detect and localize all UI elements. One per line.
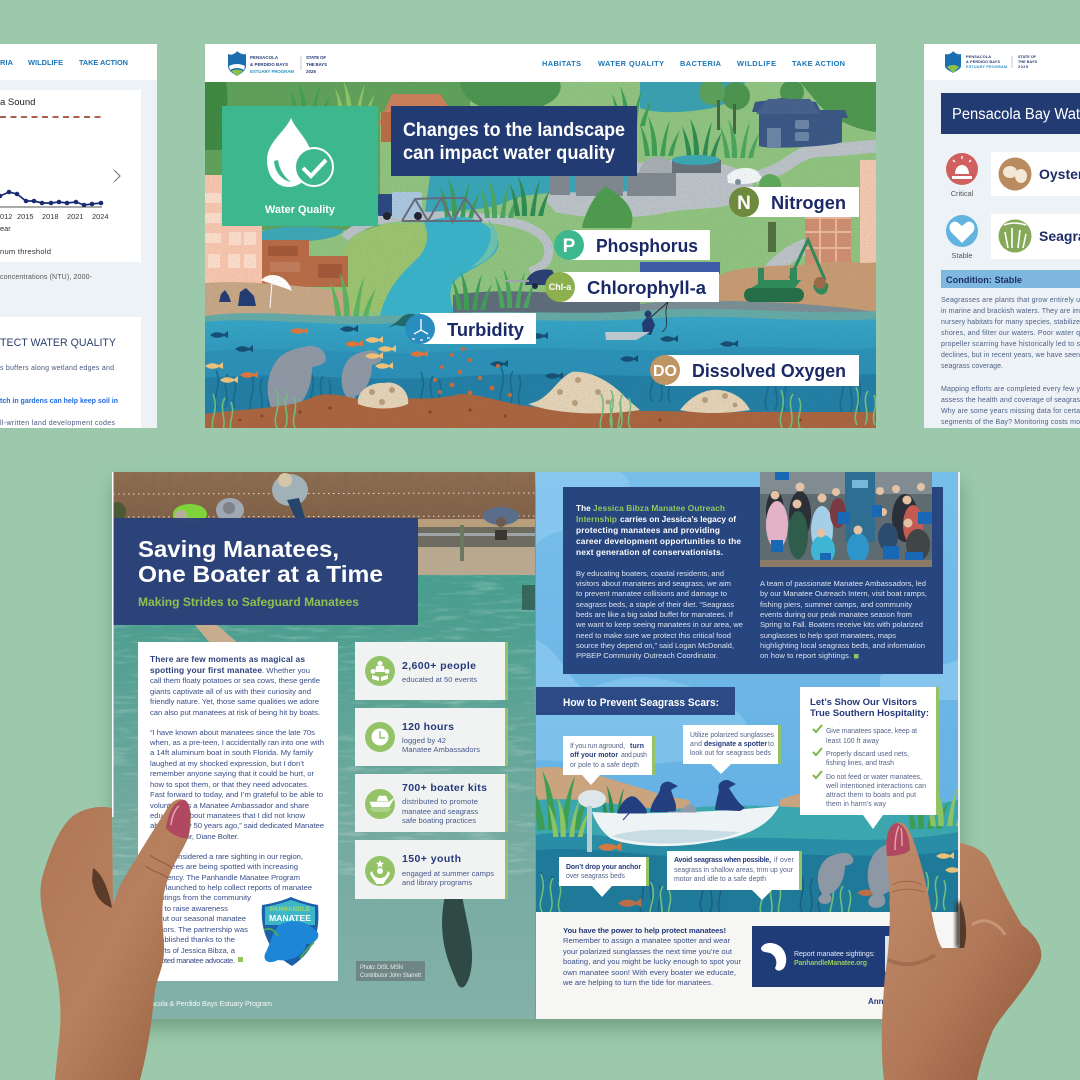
panel: left web page, turbidity chart: num threshold	[0, 247, 51, 256]
panel: right web page, Pensacola Bay status: segments of the Bay? Monitoring costs mo	[941, 419, 1080, 426]
panel: centre web page header: THE BAYS	[306, 62, 327, 67]
callout: anchor	[559, 857, 649, 897]
boat with passengers	[578, 780, 779, 852]
internship story panel: sunglasses to help spot manatees, maps	[760, 631, 896, 640]
title block: One Boater at a Time	[138, 561, 383, 587]
label: nitrogen: Nitrogen	[771, 192, 846, 213]
callout: southern hospitality tips: Give manatees space, keep at	[826, 728, 917, 735]
panel: right web page, Pensacola Bay status: in marine and brackish waters. They are im	[941, 308, 1080, 315]
label: turbidity: Turbidity	[447, 319, 525, 340]
panel: right web page, Pensacola Bay status: 2025	[1018, 65, 1028, 69]
label: chlorophyll-a: Chl-a	[549, 282, 572, 292]
internship story panel: career development opportunities to the	[576, 536, 741, 546]
stat card: people	[355, 642, 508, 700]
magazine drop shadow	[112, 482, 962, 1030]
article text panel: spotting your first manatee	[150, 665, 262, 675]
heading: changes to the landscape: can impact water quality	[403, 143, 615, 164]
panel: left web page, turbidity chart: ll-written land development codes	[0, 420, 116, 427]
callout: run aground: or pole to a safe depth	[570, 762, 639, 769]
label: chlorophyll-a	[545, 272, 719, 302]
stat card: boater kits: manatee and seagrass	[402, 807, 478, 816]
article text panel: and to raise awareness	[150, 904, 228, 913]
stat card: boater kits	[355, 774, 508, 832]
callout: southern hospitality tips	[800, 687, 939, 829]
page edge	[112, 472, 114, 817]
panel: right web page, Pensacola Bay status: seagrass coverage.	[941, 363, 1003, 370]
internship story panel: Jessica Bibza Manatee Outreach	[593, 503, 725, 513]
panel: left web page, turbidity chart	[0, 44, 157, 428]
article text panel: efforts of Jessica Bibza, a	[150, 946, 236, 955]
panel: right web page, Pensacola Bay status: THE BAYS	[1018, 60, 1037, 64]
callout: southern hospitality tips: them in harm’s way	[826, 801, 887, 808]
panel: left web page, turbidity chart: s buffers along wetland edges and	[0, 365, 114, 372]
callout: anchor: over seagrass beds	[566, 873, 626, 880]
callout: designate a spotter	[683, 725, 781, 774]
article text panel: sightings from the community	[150, 893, 251, 902]
group photo of Manatee Ambassadors	[760, 472, 932, 567]
callout: southern hospitality tips: fishing lines, and trash	[826, 760, 894, 767]
label: nitrogen: N	[737, 193, 751, 214]
stat card: youth	[355, 840, 508, 899]
panel: left web page, turbidity chart: ear	[0, 224, 11, 233]
panel: right web page, Pensacola Bay status: Seagrasses are plants that grow entirely u	[941, 297, 1080, 304]
panel: right web page, Pensacola Bay status: Critical	[951, 189, 974, 198]
article text panel: manatees are being spotted with increasing	[150, 862, 298, 871]
water quality tile with drop icon: Water Quality	[265, 204, 336, 216]
internship story panel: highlighting local seagrass beds, and information	[760, 641, 925, 650]
panel: left web page, turbidity chart: tch in gardens can help keep soil in	[0, 398, 118, 405]
panel: right web page, Pensacola Bay status: Why are some years missing data for certa	[941, 408, 1080, 415]
illustration: landscape and bay cross-section	[205, 79, 880, 432]
callout: southern hospitality tips: Let’s Show Our Visitors	[810, 697, 917, 708]
label: chlorophyll-a: Chlorophyll-a	[587, 277, 707, 298]
panel: centre web page header: & PERDIDO BAYS	[250, 62, 288, 67]
call to action text: Annual	[868, 997, 895, 1006]
title block	[113, 518, 418, 625]
panel: left web page, turbidity chart: TAKE ACTION	[79, 58, 128, 67]
callout: designate a spotter: to	[768, 741, 774, 748]
label: phosphorus: P	[563, 236, 576, 257]
left hand holding magazine	[40, 799, 191, 1080]
callout: avoid seagrass: if over	[774, 857, 795, 864]
stat card: hours: Manatee Ambassadors	[402, 745, 480, 754]
article text panel: about our seasonal manatee	[150, 914, 246, 923]
label: phosphorus: Phosphorus	[596, 235, 698, 256]
stat card: people: educated at 50 events	[402, 675, 477, 684]
callout: run aground: off your motor	[570, 752, 618, 759]
panel: left web page, turbidity chart: 2024	[92, 212, 108, 221]
article text panel: remember anyone saying that it could be hurt, or	[150, 769, 314, 778]
article text panel: call them floaty potatoes or sea cows, these gentle	[150, 676, 320, 685]
call to action text: own manatee soon! With every boater we educate,	[563, 968, 736, 977]
label: dissolved oxygen: DO	[653, 363, 677, 380]
callout: southern hospitality tips: attract them to boats and put	[826, 792, 916, 799]
internship story panel: events during our peak manatee season from	[760, 610, 912, 619]
callout: avoid seagrass: motor and idle to a safe depth	[674, 876, 766, 883]
panel: right web page, Pensacola Bay status: assess the health and coverage of seagras	[941, 397, 1080, 404]
panel: centre web page header: ESTUARY PROGRAM	[250, 69, 294, 74]
article text panel: . Whether you	[262, 666, 310, 675]
stat card: hours	[355, 708, 508, 766]
badge: Panhandle Manatee: PANHANDLE	[270, 907, 310, 913]
article text panel: was launched to help collect reports of manatee	[149, 883, 312, 892]
panel: centre web page header: WATER QUALITY	[598, 59, 664, 68]
callout: designate a spotter: Utilize polarized sunglasses	[690, 732, 775, 739]
call to action text: we are helping to turn the tide for manatees.	[562, 978, 713, 987]
article text panel: friendly nature. Yet, those same qualities we adore	[150, 697, 319, 706]
stat card: youth: engaged at summer camps	[402, 869, 494, 878]
article text panel: giants captivate all of us with their curiosity and	[150, 687, 311, 696]
panel: centre web page header: 2025	[306, 69, 317, 74]
internship story panel: PPBEP Community Outreach Coordinator.	[576, 651, 718, 660]
article text panel: devoted manatee advocate.	[150, 956, 235, 965]
panel: centre web page header: BACTERIA	[680, 59, 722, 68]
callout: anchor: Don’t drop your anchor	[566, 864, 641, 871]
panel: right web page, Pensacola Bay status: & PERDIDO BAYS	[966, 60, 1000, 64]
internship story panel: need to make sure we protect this critical food	[576, 631, 731, 640]
article text panel: a 14ft aluminum boat in south Florida. My family	[150, 748, 313, 757]
internship story panel: source they depend on,” said Logan McDonald,	[576, 641, 734, 650]
panel: right web page, Pensacola Bay status: nursery habitats for many species, stabilize	[941, 319, 1080, 326]
water quality tile with drop icon	[222, 106, 378, 226]
label: nitrogen	[729, 187, 859, 217]
panel: left web page, turbidity chart: 012	[0, 212, 12, 221]
article text panel: education about manatees that I did not know	[150, 811, 305, 820]
panel: left web page, turbidity chart: 2021	[67, 212, 83, 221]
callout: designate a spotter: look out for seagrass beds	[690, 750, 772, 757]
panel: right web page, Pensacola Bay status: STATE OF	[1018, 55, 1037, 59]
call to action text: boating, and you might be lucky enough to spot your	[563, 957, 741, 966]
photo credit: Contributor John Starrett	[360, 973, 421, 979]
stat card: boater kits: 700+ boater kits	[402, 782, 487, 794]
callout: southern hospitality tips: True Southern Hospitality:	[810, 708, 929, 719]
callout: designate a spotter: designate a spotter	[704, 741, 767, 748]
label: dissolved oxygen: Dissolved Oxygen	[692, 360, 846, 381]
title block: Saving Manatees,	[138, 536, 339, 562]
panel: right web page, Pensacola Bay status: propeller scarring have historically led to s	[941, 341, 1080, 348]
callout: southern hospitality tips: Do not feed or water manatees,	[826, 774, 922, 781]
thumbnail	[166, 800, 190, 838]
report sightings box with manatee icon: Report manatee sightings:	[794, 951, 875, 958]
internship story panel: protecting manatees and providing	[576, 525, 720, 535]
article text panel: frequency. The Panhandle Manatee Program	[150, 873, 300, 882]
panel: centre web page header: TAKE ACTION	[792, 59, 845, 68]
panel: left web page, turbidity chart: TECT WATER QUALITY	[0, 337, 116, 349]
callout: avoid seagrass: seagrass in shallow areas, trim up your	[674, 867, 794, 874]
report sightings box with manatee icon: PanhandleManatee.org	[794, 960, 867, 967]
internship story panel: seagrass beds, a staple of their diet. “Seagrass	[576, 600, 734, 609]
article text panel: Ambassador, Diane Bolter.	[150, 832, 239, 841]
internship story panel: next generation of conservationists.	[576, 547, 723, 557]
panel: left magazine page with aerial photo	[108, 472, 536, 1019]
thumbnail	[886, 823, 910, 856]
heading: changes to the landscape	[391, 106, 637, 176]
internship story panel: carries on Jessica’s legacy of	[620, 514, 736, 524]
panel: left web page, turbidity chart: 2018	[42, 212, 58, 221]
page edge	[958, 472, 960, 946]
internship story panel: By educating boaters, coastal residents, and	[576, 569, 724, 578]
internship story panel: to prevent manatee collisions and damage to	[576, 589, 727, 598]
internship story panel: on how to report sightings.	[760, 651, 851, 660]
title block: Making Strides to Safeguard Manatees	[138, 595, 359, 609]
internship story panel: Spring to Fall. Boaters receive kits with polarized	[760, 620, 923, 629]
article text panel: about nearly 50 years ago,” said dedicated Manatee	[150, 821, 324, 830]
report sightings box with manatee icon	[752, 926, 890, 987]
article text panel: volunteer as a Manatee Ambassador and share	[150, 801, 309, 810]
internship story panel: Internship	[576, 514, 617, 524]
badge: Panhandle Manatee: MANATEE	[269, 913, 311, 923]
panel: centre web page header: WILDLIFE	[737, 59, 776, 68]
stat card: youth: 150+ youth	[402, 853, 461, 865]
call to action text: Remember to assign a manatee spotter and wear	[563, 936, 730, 945]
photo credit	[356, 961, 425, 981]
panel: centre web page header	[205, 44, 876, 82]
article text panel	[138, 642, 338, 981]
panel: left web page, turbidity chart: concentrations (NTU), 2000-	[0, 274, 93, 281]
internship story panel: we want to keep seeing manatees in our area, we	[575, 620, 743, 629]
callout: designate a spotter: and	[690, 741, 702, 748]
heading: how to prevent seagrass scars: How to Prevent Seagrass Scars:	[563, 697, 719, 709]
callout: southern hospitality tips: well intentioned interactions can	[825, 783, 926, 790]
callout: southern hospitality tips: Properly discard used nets,	[826, 751, 909, 758]
panel: right web page, Pensacola Bay status: declines, but in recent years, we have seen	[941, 352, 1080, 359]
panel: right web page, Pensacola Bay status	[924, 44, 1080, 428]
call to action text: You have the power to help protect manatees!	[563, 926, 726, 935]
callout: run aground: turn	[630, 743, 644, 750]
panel: right magazine page	[530, 472, 969, 1019]
label: turbidity	[405, 313, 536, 344]
article text panel: “I have known about manatees since the late 70s	[150, 728, 315, 737]
right hand holding magazine	[882, 822, 1041, 1080]
internship story panel: fishing piers, summer camps, and community	[760, 600, 912, 609]
label: dissolved oxygen	[650, 355, 859, 386]
article text panel: Fast forward to today, and I’m grateful to be able to	[150, 790, 323, 799]
stat card: people: 2,600+ people	[402, 660, 476, 672]
panel: centre web page header: PENSACOLA	[250, 55, 279, 60]
label: phosphorus	[554, 230, 710, 260]
callout: avoid seagrass	[667, 851, 802, 900]
call to action text	[563, 928, 883, 1004]
panel: centre web page header: STATE OF	[306, 55, 326, 60]
internship story panel: visitors about manatees and seagrass, we aim	[576, 579, 731, 588]
callout: run aground	[563, 736, 655, 785]
panel: left web page, turbidity chart: WILDLIFE	[28, 58, 63, 67]
callout: avoid seagrass: Avoid seagrass when possible,	[674, 857, 771, 864]
panel: right web page, Pensacola Bay status: Stable	[952, 251, 972, 260]
stat card: boater kits: safe boating practices	[402, 816, 476, 825]
internship story panel: The	[576, 503, 591, 513]
panel: right web page, Pensacola Bay status: shores, and filter our waters. Poor water q	[941, 330, 1080, 337]
panel: right web page, Pensacola Bay status: Mapping efforts are completed every few y	[941, 386, 1080, 393]
internship story panel	[563, 487, 943, 674]
article text panel: laughed at my shocked expression, but I don’t	[150, 759, 305, 768]
stat card: hours: 120 hours	[402, 721, 454, 733]
panel: right web page, Pensacola Bay status: ESTUARY PROGRAM	[966, 65, 1007, 69]
panel: right web page, Pensacola Bay status: Condition: Stable	[946, 275, 1022, 285]
article text panel: visitors. The partnership was	[150, 925, 248, 934]
panel: centre web page header: HABITATS	[542, 59, 581, 68]
panel: right web page, Pensacola Bay status: PENSACOLA	[966, 55, 991, 59]
gap behind right hand fingers	[956, 902, 961, 948]
heading: changes to the landscape: Changes to the landscape	[403, 120, 625, 141]
aerial photo: boardwalk	[108, 472, 535, 575]
callout: run aground: If you run aground,	[570, 743, 625, 750]
stat card: youth: and library programs	[402, 878, 472, 887]
internship story panel: by our Manatee Outreach Intern, visit boat ramps,	[760, 589, 927, 598]
article text panel: how to spot them, or that they need advocates.	[150, 780, 309, 789]
internship story panel: A team of passionate Manatee Ambassadors, led	[760, 579, 926, 588]
callout: southern hospitality tips: least 100 ft away	[826, 738, 880, 745]
heading: how to prevent seagrass scars	[536, 687, 735, 715]
article text panel: There are few moments as magical as	[150, 654, 305, 664]
panel: left web page, turbidity chart: 2015	[17, 212, 33, 221]
stat card: hours: logged by 42	[402, 736, 446, 745]
article text panel: Once considered a rare sighting in our region,	[150, 852, 303, 861]
article text panel: can also put manatees at risk of being hit by boats.	[150, 708, 320, 717]
call to action text: your polarized sunglasses the next time you’re out	[563, 947, 733, 956]
article text panel: established thanks to the	[150, 935, 235, 944]
footer: page credit: Pensacola & Perdido Bays Estuary Program	[135, 999, 272, 1008]
panel: left web page, turbidity chart: a Sound	[0, 97, 35, 108]
photo credit: Photo: DISL MSN	[360, 965, 403, 971]
seagrass scars illustration	[530, 677, 969, 920]
panel: left web page, turbidity chart: RIA	[0, 58, 14, 67]
article text panel: when, as a pre-teen, I accidentally ran into one with	[149, 738, 324, 747]
badge: Panhandle Manatee	[262, 897, 318, 966]
stat card: boater kits: distributed to promote	[402, 797, 478, 806]
callout: run aground: and push	[621, 752, 647, 759]
internship story panel: beds are like a big salad buffet for manatees. If	[576, 610, 734, 619]
